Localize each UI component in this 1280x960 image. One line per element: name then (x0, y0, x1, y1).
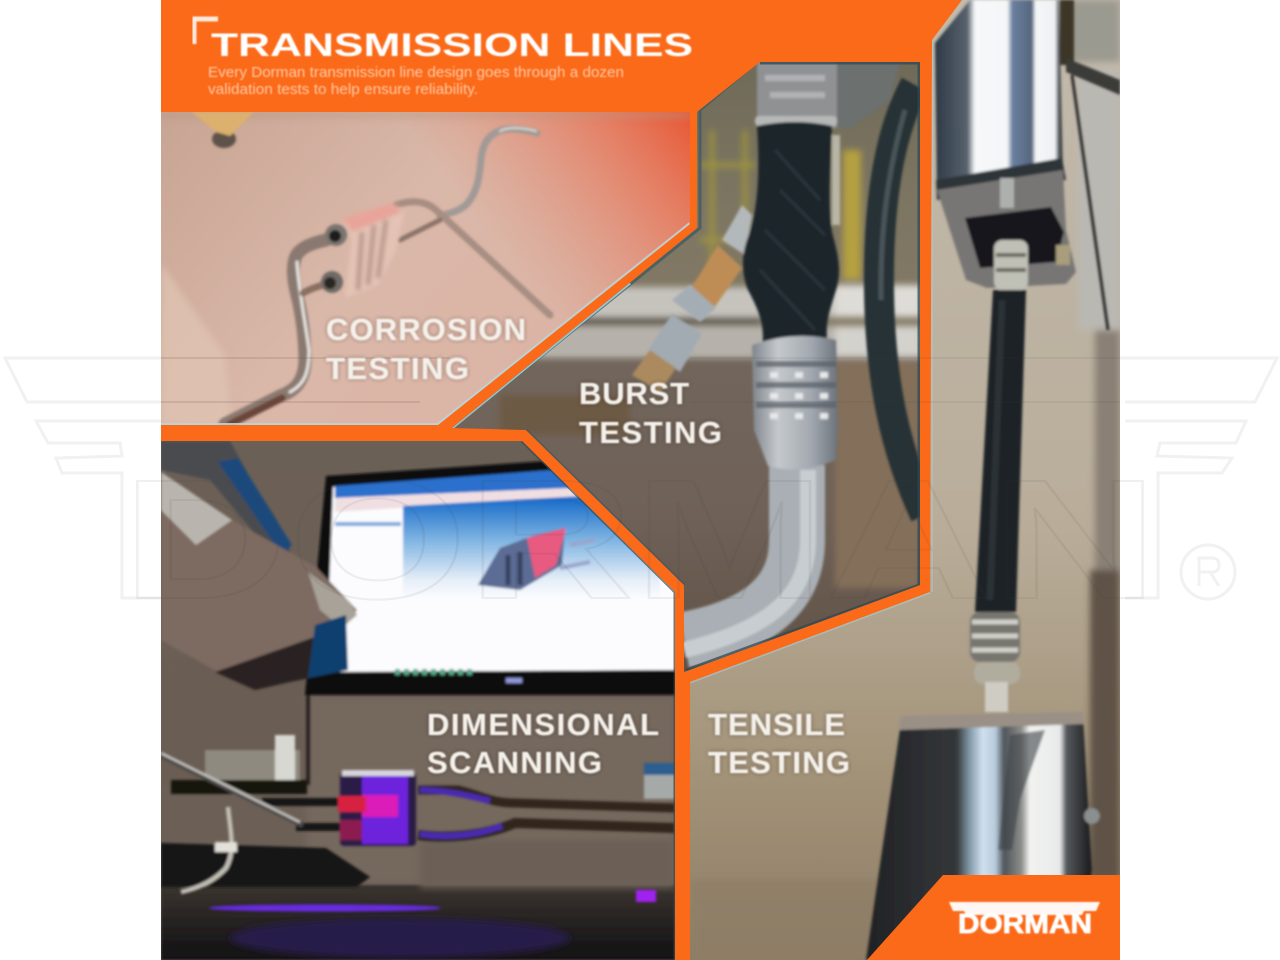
label: corrosion testing: TESTING (326, 351, 469, 386)
label: tensile testing: TESTING (708, 745, 850, 780)
panel: tensile testing photo (680, 0, 1120, 960)
panel: dimensional scanning photo (161, 440, 680, 960)
test block (340, 772, 416, 846)
panel: burst testing photo (440, 60, 930, 676)
panel: corrosion testing photo (161, 112, 691, 427)
label: corrosion testing: CORROSION (326, 312, 526, 347)
icon: corner bracket (194, 19, 218, 44)
panel: orange bottom-right logo tab (867, 875, 1120, 960)
shelf (306, 695, 310, 785)
brass fitting (690, 245, 742, 308)
lines to block (418, 790, 675, 808)
watermark overlay on photos (122, 358, 1158, 635)
watermark overlay on photos: DORMAN (122, 445, 1158, 635)
label: dimensional scanning: DIMENSIONAL (427, 707, 659, 742)
subtitle (208, 65, 624, 98)
logo: Dorman: DORMAN (958, 908, 1092, 939)
label: tensile testing (708, 707, 850, 780)
label: dimensional scanning: SCANNING (427, 745, 602, 780)
label: corrosion testing (326, 312, 526, 386)
label: tensile testing: TENSILE (708, 707, 845, 742)
subtitle: validation tests to help ensure reliability. (208, 82, 478, 98)
label: dimensional scanning (427, 707, 659, 780)
title block (194, 19, 693, 98)
subtitle: Every Dorman transmission line design goes through a dozen (208, 65, 624, 81)
heading: TRANSMISSION LINES (211, 27, 693, 63)
watermark: Dorman logo outline (5, 358, 1277, 599)
logo: Dorman (949, 902, 1100, 939)
watermark: registered mark (1181, 545, 1235, 599)
top-left tan object (212, 130, 236, 148)
label: burst testing: TESTING (579, 415, 722, 450)
label: burst testing (579, 376, 722, 450)
panel: orange background frame (161, 0, 1120, 960)
label: burst testing: BURST (579, 376, 689, 411)
monitor (305, 461, 680, 695)
scanner arm (161, 441, 290, 552)
